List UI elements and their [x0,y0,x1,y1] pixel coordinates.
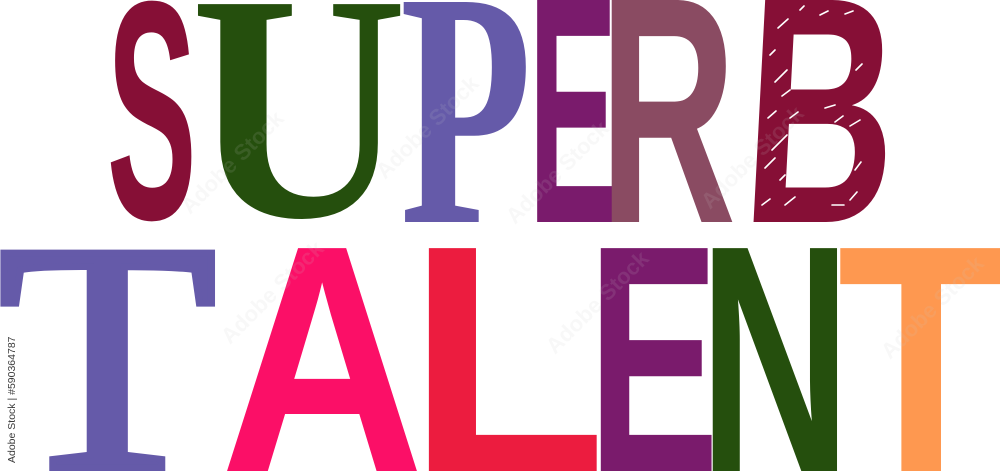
watermarks: Adobe Stock [216,235,329,349]
heading: TALENT [0,176,1000,471]
letter B hatching [762,6,862,205]
watermarks: Adobe Stock [176,105,289,219]
heading: SUPERB [107,0,906,296]
watermarks: Adobe Stock [696,100,809,214]
watermarks: Adobe Stock [541,245,654,359]
watermarks: Adobe Stock [501,115,614,229]
watermarks [176,70,989,364]
watermarks: Adobe Stock [876,250,989,364]
watermarks: Adobe Stock [371,70,484,184]
stock credit: Adobe Stock | #590364787 [6,336,18,463]
